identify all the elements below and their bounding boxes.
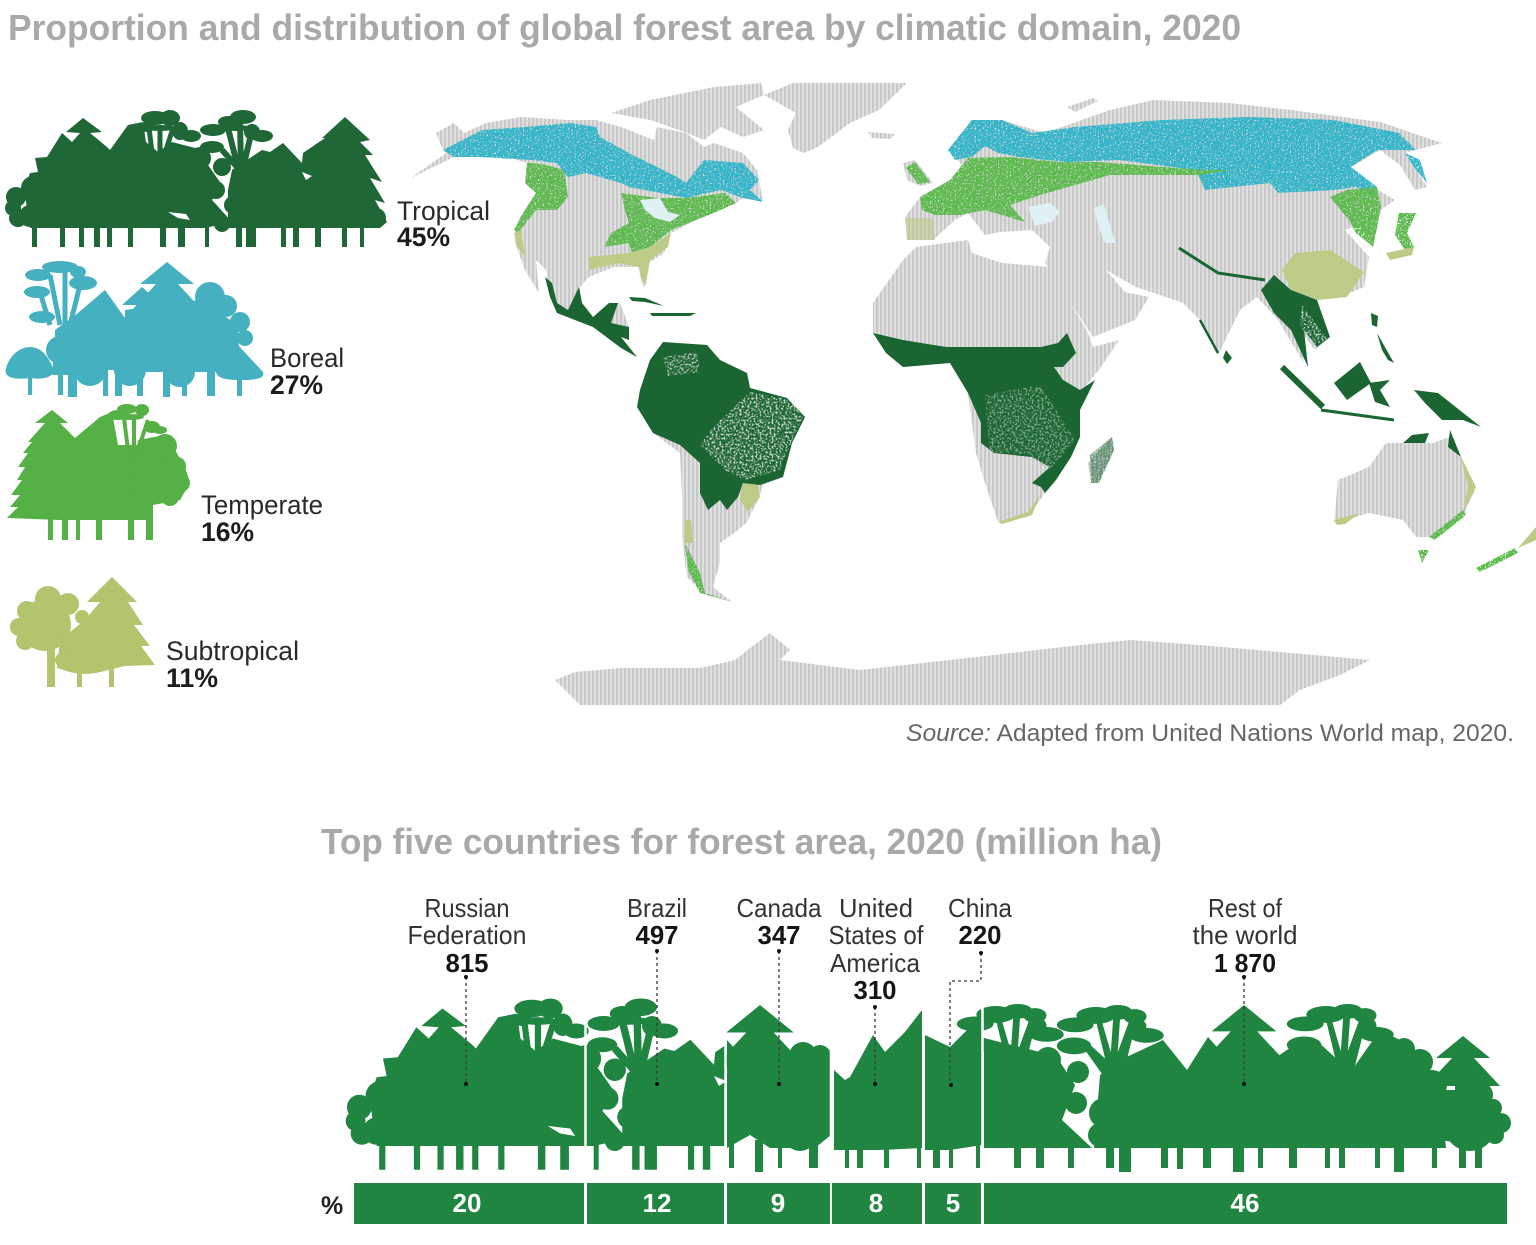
label: subtropical — [166, 636, 299, 693]
boreal forest — [443, 117, 1427, 202]
label: boreal — [270, 343, 344, 400]
forest silhouette: top countries — [346, 998, 1511, 1172]
percentage bar: 12 — [643, 1188, 671, 1218]
forest legend: boreal — [6, 261, 263, 397]
subtropical forest — [514, 218, 1536, 548]
label: tropical: Tropical — [397, 196, 490, 226]
tropical forest — [545, 248, 1481, 510]
land masses — [411, 83, 1476, 705]
label: subtropical: 11% — [166, 663, 218, 693]
label: Russian Federation: 815 — [446, 948, 488, 978]
label: subtropical: Subtropical — [166, 636, 299, 666]
world map — [411, 83, 1536, 705]
forest legend: tropical — [5, 110, 387, 247]
label: Russian Federation: Russian — [424, 893, 510, 923]
label: United States of America: 310 — [854, 975, 896, 1005]
leader lines — [464, 949, 1246, 1087]
label: Rest of the world — [1192, 893, 1298, 978]
label: United States of America: United — [839, 893, 913, 923]
percentage bar: 5 — [946, 1188, 960, 1218]
percentage bar: 8 — [869, 1188, 883, 1218]
label: United States of America: America — [830, 948, 921, 978]
label: temperate — [201, 490, 323, 547]
label: Canada — [736, 893, 822, 950]
label: Russian Federation — [408, 893, 526, 978]
temperate forest — [514, 157, 1518, 602]
mottled partly forested areas — [663, 305, 1328, 480]
label: Brazil: 497 — [636, 920, 678, 950]
percentage bar — [321, 1183, 1507, 1224]
label: Rest of the world: Rest of — [1208, 893, 1283, 923]
label: Rest of the world: the world — [1192, 920, 1298, 950]
label: temperate: Temperate — [201, 490, 323, 520]
country labels — [408, 893, 1298, 1005]
percentage bar: 20 — [453, 1188, 481, 1218]
lakes — [640, 198, 1116, 243]
label: United States of America: States of — [828, 920, 924, 950]
map source note: Source: Adapted from United Nations World map, 2020. — [906, 720, 1514, 747]
forest legend: subtropical — [10, 577, 155, 687]
percent symbol: % — [321, 1192, 343, 1220]
label: temperate: 16% — [201, 517, 254, 547]
label: boreal: 27% — [270, 370, 323, 400]
label: China: 220 — [958, 920, 1002, 950]
label: China — [948, 893, 1013, 950]
label: United States of America — [828, 893, 924, 1005]
forest legend: temperate — [7, 404, 190, 540]
title: global forest area: Proportion and distribution of global forest area by climatic domain, 2020 — [8, 7, 1241, 48]
label: tropical — [397, 196, 490, 252]
label: China: China — [948, 893, 1013, 923]
label: boreal: Boreal — [270, 343, 344, 373]
label: Canada: Canada — [736, 893, 822, 923]
percentage bar: 46 — [1231, 1188, 1259, 1218]
label: tropical: 45% — [397, 222, 450, 252]
label: Canada: 347 — [758, 920, 800, 950]
label: Russian Federation: Federation — [408, 920, 526, 950]
label: Brazil — [627, 893, 687, 950]
country dividers — [586, 1000, 982, 1175]
label: Brazil: Brazil — [627, 893, 687, 923]
percentage bar: 9 — [771, 1188, 785, 1218]
label: Rest of the world: 1 870 — [1214, 948, 1276, 978]
title: top five countries: Top five countries for forest area, 2020 (million ha) — [321, 821, 1162, 862]
